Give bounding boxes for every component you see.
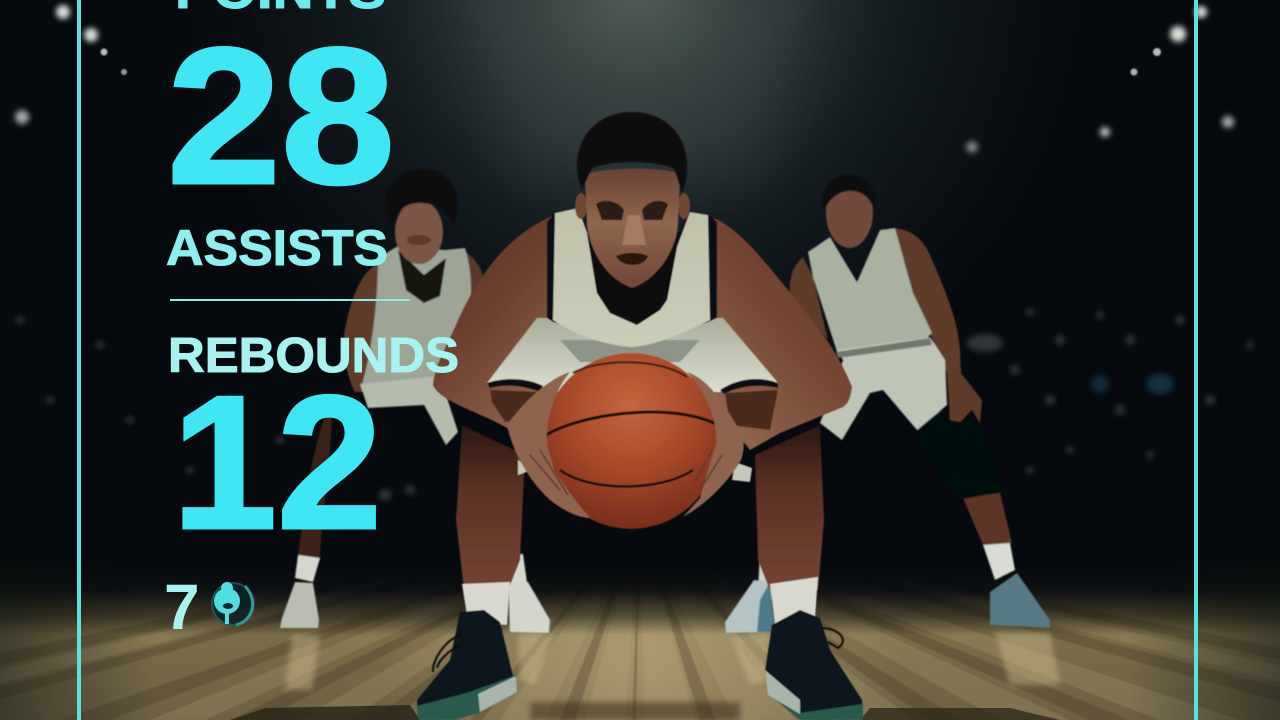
right vertical frame line	[1194, 0, 1198, 720]
value: points 28: 28	[167, 8, 395, 225]
main player shoes	[417, 610, 863, 720]
main player legs	[456, 425, 824, 590]
main player	[417, 112, 863, 720]
floor reflections under back shoes	[285, 632, 1060, 690]
main player head	[575, 112, 690, 288]
main player socks	[462, 577, 818, 625]
value: 7: 7	[164, 571, 200, 643]
value: rebounds 12: 12	[172, 357, 382, 569]
label: rebounds: REBOUNDS	[168, 329, 459, 383]
wooden court floor	[0, 586, 1280, 720]
main player hands	[507, 372, 744, 518]
stats column	[164, 0, 459, 643]
left background player	[280, 169, 550, 633]
right background player	[725, 175, 1050, 633]
arena lights and crowd bokeh	[15, 5, 1254, 501]
left vertical frame line	[77, 0, 81, 720]
main player arms	[433, 216, 852, 450]
main player shorts	[487, 318, 778, 482]
divider line	[170, 299, 410, 301]
label: assists: ASSISTS	[166, 220, 388, 276]
basketball	[543, 353, 719, 529]
main player jersey	[547, 208, 717, 347]
icon: teal ball emblem	[212, 582, 254, 625]
